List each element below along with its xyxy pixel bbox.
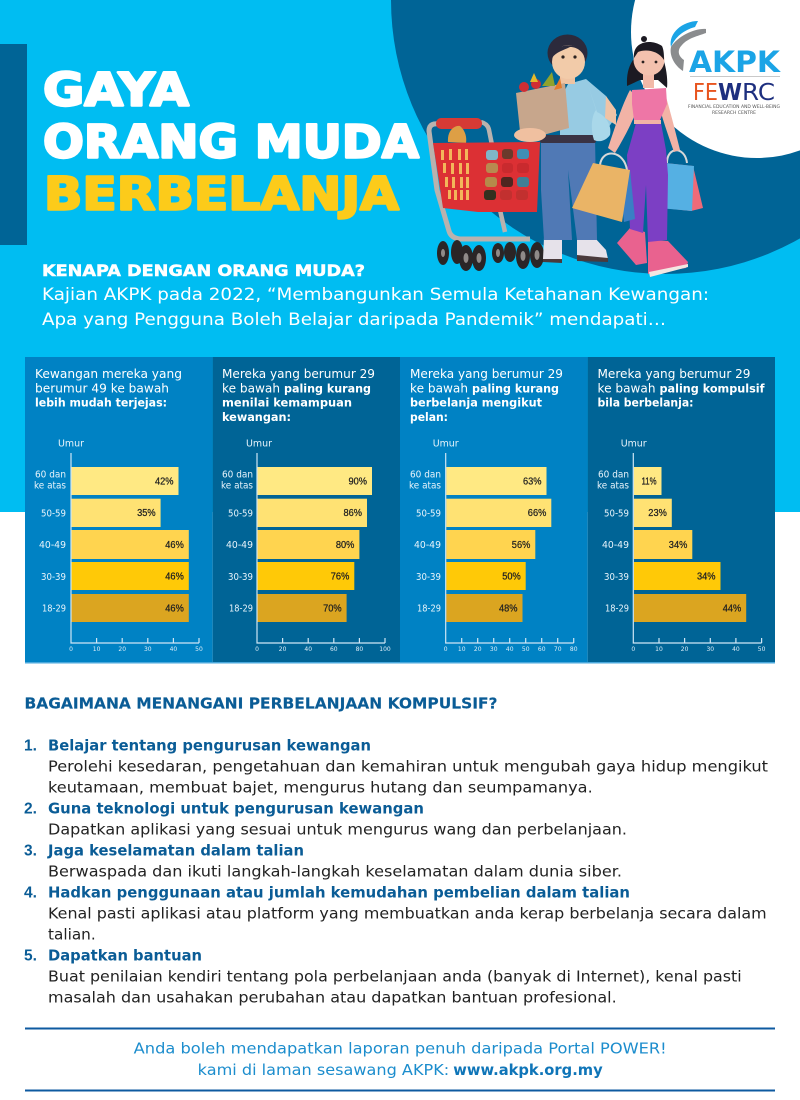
panel 3 bar chart: 30-39 (416, 572, 441, 583)
panel 1 bar chart: 46% (165, 540, 184, 551)
tip 3 (24, 841, 622, 881)
panel 3 bar chart: 40 (506, 646, 514, 653)
panel 1 bar chart: 40-49 (39, 540, 66, 551)
panel 2 bar chart: 86% (344, 508, 362, 519)
tip 4: talian. (48, 925, 96, 943)
panel 2 bar chart: 30-39 (228, 572, 253, 583)
panel 2 heading: menilai kemampuan (222, 397, 352, 410)
tip 4 (24, 884, 767, 943)
panel 2 bar chart: 18-29 (229, 604, 253, 615)
panel 1 bar chart: 35% (137, 508, 156, 519)
panel 4 bar chart: 40-49 (602, 540, 629, 551)
panel 4 bar chart: 34% (669, 540, 687, 551)
logo: AKPK FEWRC: AKPK (689, 45, 782, 79)
background: cyan header (0, 0, 800, 512)
panel 2 bar chart: Umur (246, 439, 272, 450)
panel 3 bar chart: 50% (502, 572, 521, 582)
tip 1 (24, 737, 768, 797)
panel 1 bar chart: 10 (93, 646, 101, 653)
footer text (134, 1039, 667, 1079)
panel 1 bar chart: 50-59 (41, 509, 66, 520)
panel 4 bar chart: 40 (732, 646, 740, 653)
title: ORANG MUDA (43, 116, 419, 168)
intro text: KENAPA DENGAN ORANG MUDA? (42, 261, 365, 280)
panel 4 bar chart: 18-29 (605, 604, 629, 615)
logo: AKPK FEWRC: FE (693, 80, 718, 106)
panel 4 bar chart: 23% (648, 508, 667, 519)
panel 4 bar chart: Umur (621, 439, 647, 450)
panel 1 bar chart: ke atas (34, 481, 66, 492)
panel 4 bar chart: ke atas (597, 481, 629, 492)
panel 4 heading: Mereka yang berumur 29 (598, 367, 750, 381)
panel 4 bar chart: 50 (758, 646, 766, 653)
panel 3 bar chart: 56% (512, 540, 530, 551)
panel 3 heading: berbelanja mengikut (410, 397, 543, 410)
panel 3 bar chart: 66% (528, 508, 546, 519)
panel 3 bar chart: 30 (490, 646, 498, 653)
panel 1 bar chart: 46% (165, 572, 184, 582)
logo: AKPK FEWRC: RESEARCH CENTRE (712, 110, 756, 116)
panel 3 bar chart: Umur (433, 439, 459, 450)
panel 3 heading: pelan: (410, 411, 448, 424)
title: BERBELANJA (44, 168, 399, 220)
tip 2 (24, 799, 627, 838)
panel 3 bar chart: ke atas (409, 481, 441, 492)
panel 2 heading: kewangan: (222, 411, 291, 424)
panel 2 heading: paling kurang (284, 383, 371, 396)
panel 4 bar chart: 44% (723, 604, 741, 614)
panel 3 bar chart: 0 (444, 646, 448, 653)
illustration: man with grocery bag (514, 34, 617, 263)
panel 2 heading: Mereka yang berumur 29 (222, 367, 375, 381)
tip 5: Buat penilaian kendiri tentang pola perbelanjaan anda (banyak di Internet), kenal pasti (48, 968, 742, 986)
tip 5: Dapatkan bantuan (48, 947, 202, 965)
tip 5: 5. (24, 948, 37, 965)
panel 2 heading: ke bawah (222, 382, 280, 396)
tip 3: Jaga keselamatan dalam talian (47, 841, 304, 859)
panel 1 bar chart: 46% (165, 604, 184, 614)
tip 1: keutamaan, membuat bajet, mengurus hutang dan seumpamanya. (48, 779, 593, 797)
panel 3 bar chart: 50-59 (416, 509, 441, 520)
tip 1: Perolehi kesedaran, pengetahuan dan kemahiran untuk mengubah gaya hidup mengikut (48, 758, 768, 776)
panel 1 bar chart: 18-29 (42, 604, 66, 615)
panel 3 bar chart: 70 (554, 646, 562, 653)
panel 1: lebih mudah terjejas (25, 357, 213, 663)
panel 1 bar chart: 50 (195, 646, 203, 653)
panel 3 heading: Mereka yang berumur 29 (410, 367, 563, 381)
tip 4: Kenal pasti aplikasi atau platform yang membuatkan anda kerap berbelanja secara dalam (48, 904, 767, 922)
panel 2 bar chart: 60 dan (222, 470, 253, 481)
logo: AKPK FEWRC: RC (742, 80, 775, 106)
panel 1 bar chart: 30-39 (41, 572, 66, 583)
logo: AKPK FEWRC: W (718, 80, 742, 106)
white logo circle (631, 0, 800, 158)
panel 1 bar chart (34, 439, 203, 653)
intro text: Kajian AKPK pada 2022, “Membangunkan Semula Ketahanan Kewangan: (42, 285, 709, 305)
panel 3 bar chart: 63% (523, 476, 542, 488)
dark blue side bar (0, 44, 27, 245)
panel 4 bar chart: 34% (697, 572, 716, 582)
panel 1 heading (35, 367, 182, 410)
panel 1 bar chart: 42% (155, 476, 174, 488)
panel 3 bar chart: 60 dan (410, 470, 441, 481)
panel 4 bar chart: 11% (642, 476, 657, 488)
footer text: kami di laman sesawang AKPK: (198, 1061, 449, 1079)
panel 2 bar chart (221, 439, 391, 653)
panel 2: kurang menilai kemampuan (213, 357, 400, 663)
panel 1 heading: lebih mudah terjejas: (35, 397, 167, 410)
illustration: woman with shopping bags (572, 36, 703, 277)
panel 2 bar chart: 80 (356, 646, 363, 653)
panel 3 heading (410, 367, 563, 424)
panel 3 bar chart: 40-49 (414, 540, 441, 551)
panel 1 bar chart: Umur (58, 439, 84, 450)
panel 3 heading: paling kurang (472, 383, 559, 396)
panel 1 bar chart: 0 (69, 646, 73, 653)
panel 4 heading (598, 367, 765, 410)
panel 4 heading: ke bawah (598, 382, 656, 396)
tip 4: Hadkan penggunaan atau jumlah kemudahan pembelian dalam talian (48, 884, 630, 902)
tip 3: 3. (24, 842, 37, 859)
panel 2 bar chart: 50-59 (228, 509, 253, 520)
panel 4 bar chart: 50-59 (604, 509, 629, 520)
panel 1 heading: berumur 49 ke bawah (35, 382, 169, 396)
panel 1 bar chart: 30 (144, 646, 152, 653)
panel 4 bar chart: 20 (681, 646, 689, 653)
panel 1 bar chart: 20 (118, 646, 126, 653)
logo: AKPK FEWRC (671, 21, 782, 116)
panel 3 bar chart: 18-29 (417, 604, 441, 615)
panel 3 bar chart: 20 (474, 646, 482, 653)
dark blue circle behind characters (391, 0, 800, 274)
footer text: Anda boleh mendapatkan laporan penuh daripada Portal POWER! (134, 1039, 667, 1057)
panel 2 heading (222, 367, 375, 424)
panel 3 bar chart: 60 (538, 646, 546, 653)
panel 3 heading: ke bawah (410, 382, 468, 396)
panel 4 bar chart (597, 439, 766, 653)
panel 4 bar chart: 30 (706, 646, 714, 653)
illustration: shopping cart (429, 118, 544, 271)
tip 3: Berwaspada dan ikuti langkah-langkah keselamatan dalam dunia siber. (48, 863, 622, 881)
tip 2: Dapatkan aplikasi yang sesuai untuk mengurus wang dan perbelanjaan. (48, 820, 627, 838)
title (43, 64, 419, 220)
panel 4: paling kompulsif (588, 357, 775, 663)
logo: AKPK FEWRC: FINANCIAL EDUCATION AND WELL-BEING (688, 104, 780, 110)
intro text (42, 261, 709, 330)
panel 2 bar chart: 80% (336, 540, 354, 551)
tip 1: 1. (24, 738, 37, 755)
panel 2 bar chart: 40 (304, 646, 312, 653)
panel 4 heading: bila berbelanja: (598, 397, 694, 410)
intro text: Apa yang Pengguna Boleh Belajar daripada Pandemik” mendapati… (42, 310, 666, 330)
panel 2 bar chart: 76% (331, 572, 349, 582)
panel 3 bar chart: 80 (570, 646, 578, 653)
footer text: www.akpk.org.my (453, 1061, 603, 1079)
panel 3: kurang berbelanja mengikut pelan (400, 357, 588, 663)
panel 2 bar chart: 60 (330, 646, 338, 653)
title: GAYA (43, 64, 189, 116)
panel 3 bar chart: 50 (522, 646, 530, 653)
panel 4 bar chart: 30-39 (604, 572, 629, 583)
panel 2 bar chart: 40-49 (226, 540, 253, 551)
panel 1 heading: Kewangan mereka yang (35, 367, 182, 381)
panel 2 bar chart: ke atas (221, 481, 253, 492)
panel 1 bar chart: 40 (170, 646, 177, 653)
panel 3 bar chart (409, 439, 578, 653)
panel 2 bar chart: 100 (379, 646, 391, 653)
panel 2 bar chart: 70% (323, 604, 342, 614)
tip 4: 4. (24, 884, 37, 902)
panel 2 bar chart: 90% (348, 476, 367, 488)
panel 2 bar chart: 20 (279, 646, 287, 653)
panel 2 bar chart: 0 (255, 646, 259, 653)
panel 3 bar chart: 48% (499, 604, 518, 614)
panel 4 bar chart: 60 dan (598, 470, 629, 481)
panel 4 bar chart: 0 (631, 646, 635, 653)
tip 2: 2. (24, 800, 37, 817)
panel 4 bar chart: 10 (655, 646, 663, 653)
panel 4 heading: paling kompulsif (660, 383, 765, 396)
tip 5 (24, 947, 742, 1007)
panel 3 bar chart: 10 (458, 646, 466, 653)
section heading: BAGAIMANA MENANGANI PERBELANJAAN KOMPULSIF? (24, 694, 497, 712)
panel 1 bar chart: 60 dan (35, 470, 66, 481)
tip 1: Belajar tentang pengurusan kewangan (48, 737, 371, 755)
tip 5: masalah dan usahakan perubahan atau dapatkan bantuan profesional. (48, 989, 617, 1007)
tip 2: Guna teknologi untuk pengurusan kewangan (48, 799, 424, 817)
